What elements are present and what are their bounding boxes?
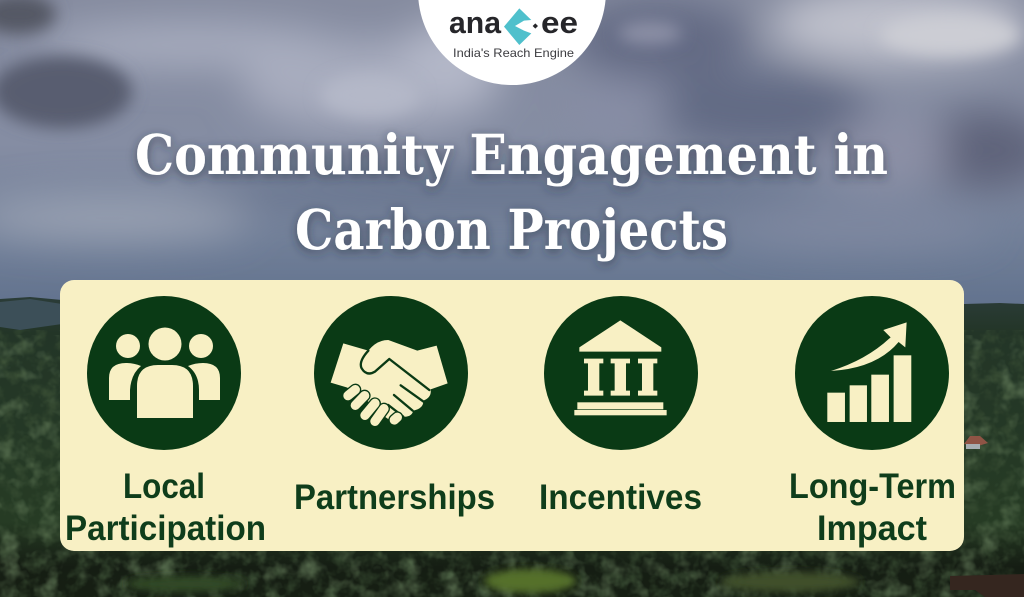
logo badge — [418, 0, 606, 85]
panel: four pillars — [60, 280, 964, 551]
logo wordmark: ee — [541, 5, 578, 40]
icon: institution — [544, 296, 698, 450]
icon: people — [87, 296, 241, 450]
house detail — [964, 436, 988, 449]
label: long-term impact: Impact — [817, 509, 927, 548]
title — [135, 122, 888, 262]
label: long-term impact — [789, 467, 956, 548]
icon: handshake — [314, 296, 468, 450]
label: local participation: Local — [123, 467, 205, 506]
label: local participation: Participation — [65, 509, 266, 548]
logo wordmark: ana — [449, 5, 502, 40]
logo wordmark — [449, 5, 578, 60]
label: long-term impact: Long-Term — [789, 467, 956, 506]
label: partnerships: Partnerships — [294, 478, 495, 517]
title: Carbon Projects — [295, 197, 728, 262]
icon: growth chart — [795, 296, 949, 450]
logo wordmark: India's Reach Engine — [453, 46, 574, 60]
background: cloudy sky — [0, 0, 1024, 320]
title: Community Engagement in — [135, 122, 888, 187]
label: local participation — [65, 467, 266, 548]
background: forest — [0, 297, 1024, 597]
label: incentives: Incentives — [539, 478, 702, 517]
